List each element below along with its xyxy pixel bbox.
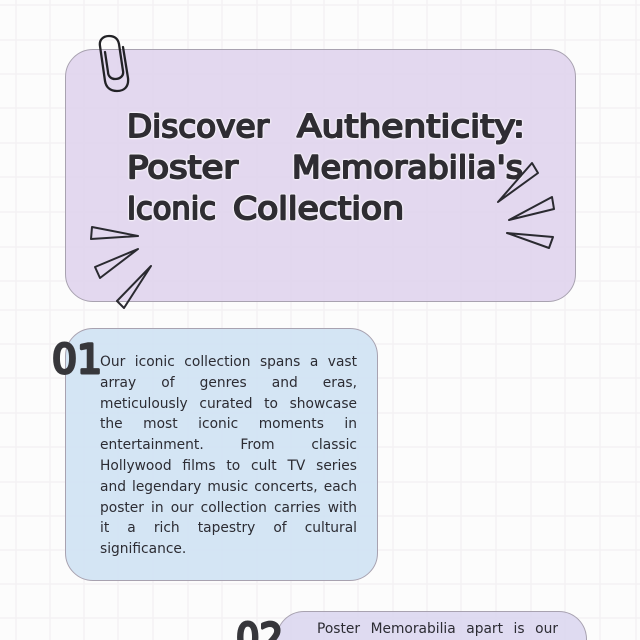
text block: section 02 body: Poster Memorabilia apart is our (317, 621, 558, 637)
panel: title card (65, 49, 576, 302)
text block: section 01 body (100, 354, 357, 557)
heading: title: Collection (233, 191, 404, 227)
icon: left accent spikes (90, 226, 152, 309)
panel: section 01 card (65, 328, 378, 581)
text block: section 01 body: poster in our collection carries with (100, 500, 357, 516)
icon: paperclip (98, 34, 130, 92)
icon: right accent spikes (497, 162, 555, 249)
text block: section 01 body: array of genres and eras, (100, 375, 357, 391)
panel: section 02 card (276, 611, 587, 640)
heading: title: Discover (127, 109, 269, 145)
text block: section 01 body: it a rich tapestry of cultural (100, 520, 357, 536)
text block: section 01 body: meticulously curated to showcase (100, 396, 357, 412)
text block: section 01 body: significance. (100, 541, 186, 557)
heading: title (127, 109, 525, 227)
text block: section 01 body: and legendary music concerts, each (100, 479, 357, 495)
heading: title: Iconic (127, 191, 216, 227)
text block: section 01 body: entertainment. From classic (100, 437, 357, 453)
text block: section 01 body: Hollywood films to cult TV series (100, 458, 357, 474)
heading: title: Authenticity: (297, 109, 525, 145)
heading: title: Poster (127, 150, 238, 186)
text block: section 01 body: the most iconic moments in (100, 416, 357, 432)
heading: title: Memorabilia's (292, 150, 523, 186)
text block: section 01 body: Our iconic collection spans a vast (100, 354, 357, 370)
